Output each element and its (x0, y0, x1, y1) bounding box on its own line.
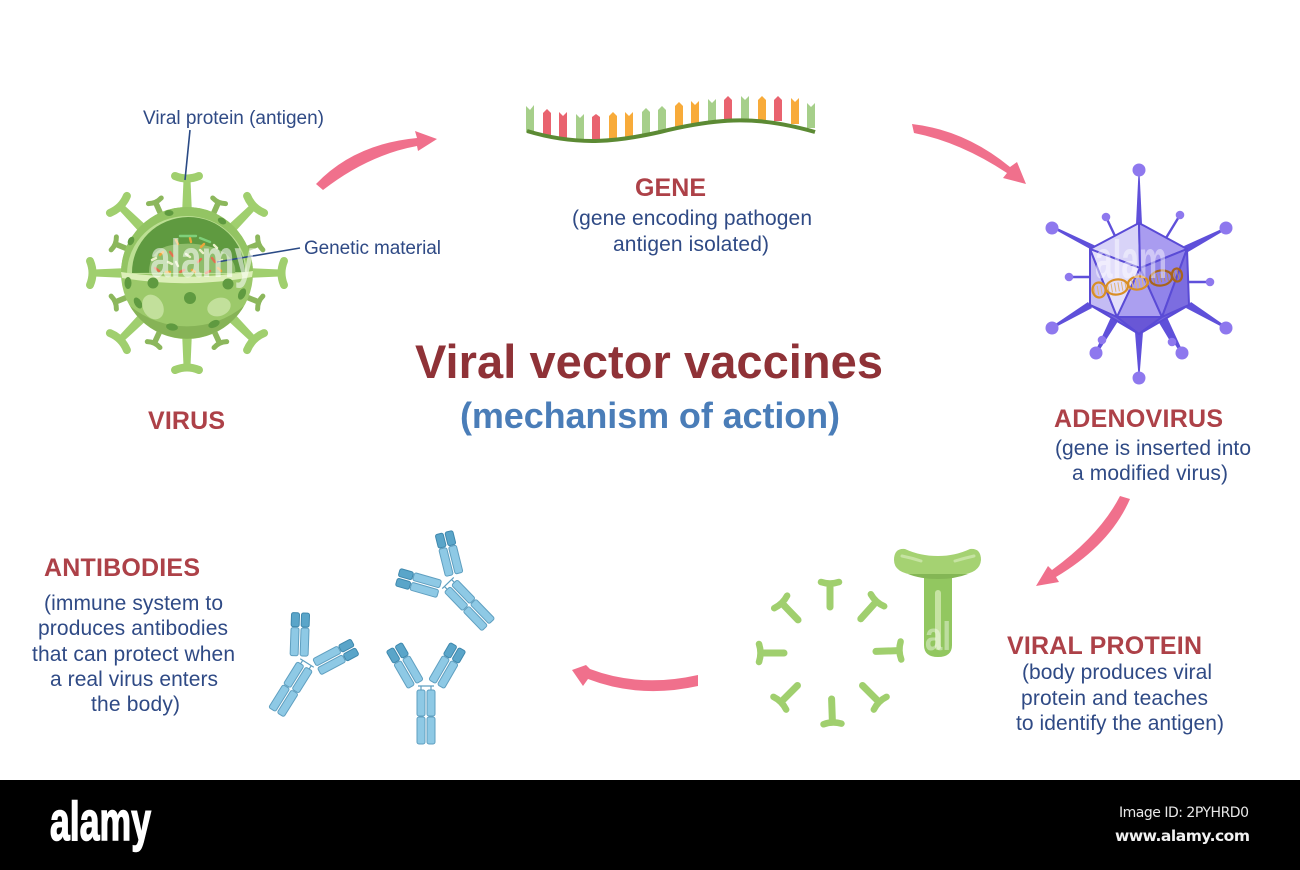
heading: viral protein: VIRAL PROTEIN (1007, 632, 1202, 660)
sub: surface spots (124, 210, 248, 331)
text: adenovirus description: a modified virus) (1072, 462, 1228, 485)
text: viral protein description: (body produces viral (1022, 661, 1212, 684)
text: antibodies description: a real virus enters (50, 668, 218, 691)
sub: spikes (1051, 172, 1227, 376)
sub: capsid faces (1090, 223, 1189, 334)
text: adenovirus description: (gene is inserted into (1055, 437, 1251, 460)
label: genetic material: Genetic material (304, 238, 441, 259)
text: viral protein description (1016, 661, 1224, 735)
text: viral protein description: to identify the antigen) (1016, 712, 1224, 735)
text: viral protein description: protein and teaches (1021, 687, 1208, 710)
label line: genetic material (217, 248, 300, 262)
text: antibodies description: the body) (91, 693, 180, 716)
heading: gene: GENE (635, 174, 706, 202)
icon: adenovirus (1046, 164, 1232, 384)
text: antibodies description: produces antibodies (38, 617, 228, 640)
subtitle: (mechanism of action) (460, 395, 840, 436)
arrow: gene to adenovirus (912, 124, 1026, 184)
watermark text: alamy (150, 229, 255, 289)
icon: antibodies (243, 524, 517, 744)
icon: virus (90, 176, 284, 370)
icon: large viral protein (894, 549, 981, 657)
arrow: viral protein to antibodies (572, 665, 698, 691)
watermark text: al (925, 615, 951, 659)
label line: viral protein (185, 130, 190, 180)
footer bar (0, 780, 1300, 870)
watermark text (150, 229, 1167, 659)
text: gene description: (gene encoding pathogen (572, 207, 812, 230)
icon: gene strand (526, 96, 815, 141)
watermark text: alam (1095, 230, 1167, 290)
icon: ring of small viral proteins (759, 582, 901, 724)
sub: genetic material (152, 236, 222, 273)
text: antibodies description: that can protect when (32, 643, 235, 666)
heading: virus: VIRUS (148, 407, 225, 435)
footer url: www.alamy.com (1115, 827, 1250, 845)
text: gene description: antigen isolated) (613, 233, 769, 256)
heading: antibodies: ANTIBODIES (44, 554, 200, 582)
text: gene description (572, 207, 812, 256)
text: antibodies description (32, 592, 235, 716)
text: antibodies description: (immune system to (44, 592, 223, 615)
footer logo: alamy (50, 790, 151, 852)
title: Viral vector vaccines (415, 335, 883, 388)
footer image id: Image ID: 2PYHRD0 (1119, 805, 1249, 821)
arrow: virus to gene (316, 131, 437, 190)
sub: DNA helix (1092, 268, 1183, 298)
arrow: adenovirus to viral protein (1036, 496, 1130, 586)
label: viral protein antigen: Viral protein (antigen) (143, 108, 324, 129)
heading: adenovirus: ADENOVIRUS (1054, 405, 1223, 433)
text: adenovirus description (1055, 437, 1251, 485)
